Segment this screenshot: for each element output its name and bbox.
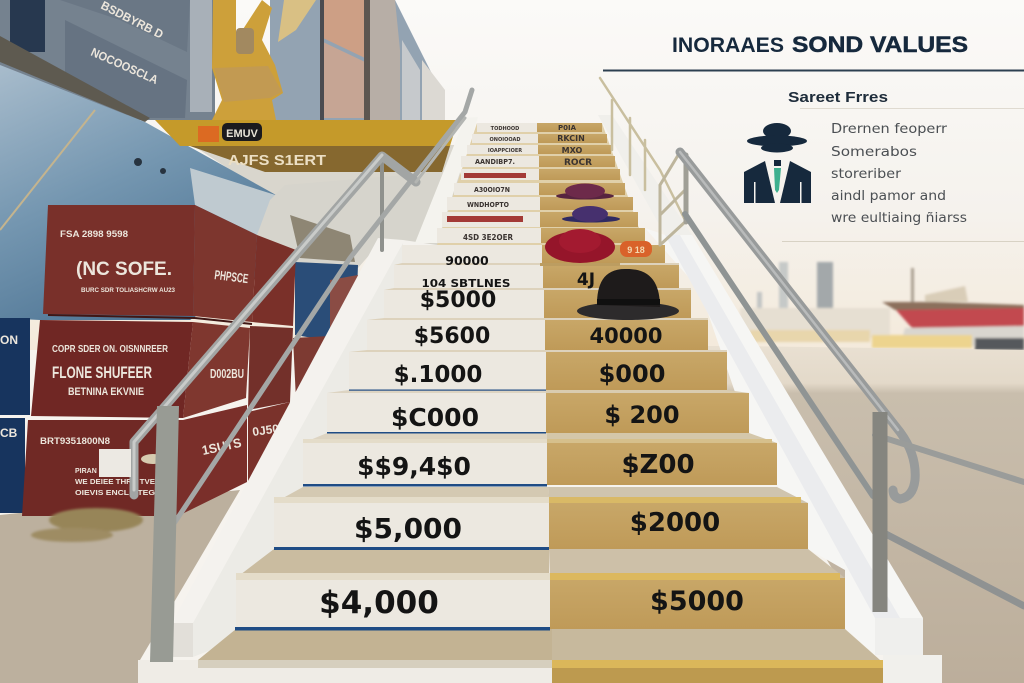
upper step small text: ONOIOOAD (490, 137, 520, 143)
upper step small text: 4SD 3E2OER (463, 233, 513, 242)
container text: 0J50 (251, 421, 280, 439)
white step values: $.1000 (394, 362, 482, 388)
left ground (0, 490, 240, 683)
container brand: NOCOOSCLA (89, 45, 161, 87)
panel body text: Somerabos (831, 144, 917, 160)
upper step small text: RKCIN (557, 134, 585, 143)
container text: (NC SOFE. (76, 259, 172, 280)
white risers (236, 123, 550, 629)
white step values: 90000 (445, 253, 489, 268)
gold risers (537, 123, 845, 629)
white step values: $4,000 (319, 585, 439, 621)
white step values: $C000 (391, 403, 479, 432)
panel body text: Drernen feoperr (831, 121, 947, 137)
upper step small text (447, 124, 592, 242)
container text (40, 229, 280, 497)
upper step small text: P0IA (558, 124, 577, 132)
panel body text: aindl pamor and (831, 188, 946, 204)
red flowers (540, 229, 620, 266)
stair treads (198, 123, 880, 660)
gold step values: 4J (577, 270, 595, 290)
base step (138, 660, 552, 683)
white step values (319, 253, 511, 621)
right handrails (600, 78, 1024, 612)
container text: PIRAN (75, 468, 97, 475)
container text: WE DEIEE THRN TVE (75, 479, 155, 486)
right post (872, 412, 888, 612)
white step values: $5600 (414, 324, 490, 349)
ship rail (0, 36, 150, 122)
white step values: $$9,4$0 (357, 452, 471, 481)
gold step values: 40000 (589, 324, 663, 348)
panel body text (831, 121, 967, 226)
upper step small text: IOAPPCIOER (488, 148, 522, 154)
hat: purple small (562, 206, 620, 222)
crane beam with sign (155, 120, 458, 172)
rope pile (31, 508, 143, 542)
white fitting on rail (99, 449, 165, 477)
container text: 1SUTS (201, 435, 243, 458)
building facade (192, 0, 460, 250)
gold step values: $Z00 (621, 450, 695, 480)
container text: D002BU (210, 366, 244, 381)
beam text: AJFS S1ERT (228, 152, 326, 169)
concrete quay right (700, 346, 1024, 683)
distant port skyline and ship (740, 262, 1024, 350)
orange badge (620, 241, 652, 257)
hat: plum small (556, 184, 614, 200)
top-left stacked ship containers (0, 0, 215, 122)
title: INORAAES (672, 34, 784, 57)
gold step values (577, 270, 744, 617)
navy container text: ON (0, 333, 18, 347)
right staircase side wall (598, 115, 942, 683)
black hat (577, 269, 679, 320)
step nosing strips (236, 439, 840, 580)
upper step small text: TODHOOD (491, 126, 519, 132)
red cargo containers (22, 205, 358, 516)
white step values: $5000 (420, 288, 496, 313)
container text: FSA 2898 9598 (60, 229, 128, 239)
upper step small text: WNDHOPTO (467, 201, 509, 209)
sky background (0, 0, 1024, 350)
title (672, 32, 968, 57)
gold step values: $2000 (630, 508, 720, 538)
navy container code: CB (0, 426, 18, 440)
upper step small text: ROCR (564, 158, 592, 168)
white step values: $5,000 (354, 512, 462, 545)
upper step small text: A30OIO7N (474, 186, 510, 194)
left handrails (134, 90, 472, 522)
gold step values: $5000 (650, 586, 744, 617)
container text: FLONE SHUFEER (52, 363, 152, 382)
left railing post (150, 406, 179, 662)
container text: COPR SDER ON. OISNNREER (52, 344, 169, 355)
gold step values: $000 (599, 360, 665, 388)
orange badge: 9 18 (627, 245, 645, 255)
navy containers (0, 262, 358, 513)
ship hull (0, 65, 310, 320)
title rule (603, 70, 1024, 72)
container text: BURC SDR TOLIASHCRW AU23 (81, 288, 176, 294)
container text: OIEVIS ENCLU TEG (75, 490, 156, 497)
title: SOND VALUES (792, 32, 968, 57)
white step values: 104 SBTLNES (422, 277, 511, 290)
container text: PHPSCE (214, 267, 249, 286)
panel heading: Sareet Frres (788, 89, 888, 106)
yellow crane (212, 0, 316, 120)
panel body text: storeriber (831, 166, 901, 182)
panel thin dividers (782, 108, 1024, 242)
panel body text: wre eultiaing ñiarss (831, 210, 967, 226)
left staircase side wall (172, 117, 478, 657)
upper step small text: AANDIBP7. (475, 158, 515, 166)
gold step values: $ 200 (604, 401, 680, 429)
staircase (138, 123, 883, 683)
container text: BRT9351800N8 (40, 436, 110, 446)
upper step small text: MXO (562, 146, 583, 155)
container text: BETNINA EKVNIE (68, 386, 144, 398)
blue edge lines (235, 390, 550, 630)
icon: man in hat and suit (744, 123, 811, 203)
badge text: EMUV (226, 128, 259, 140)
